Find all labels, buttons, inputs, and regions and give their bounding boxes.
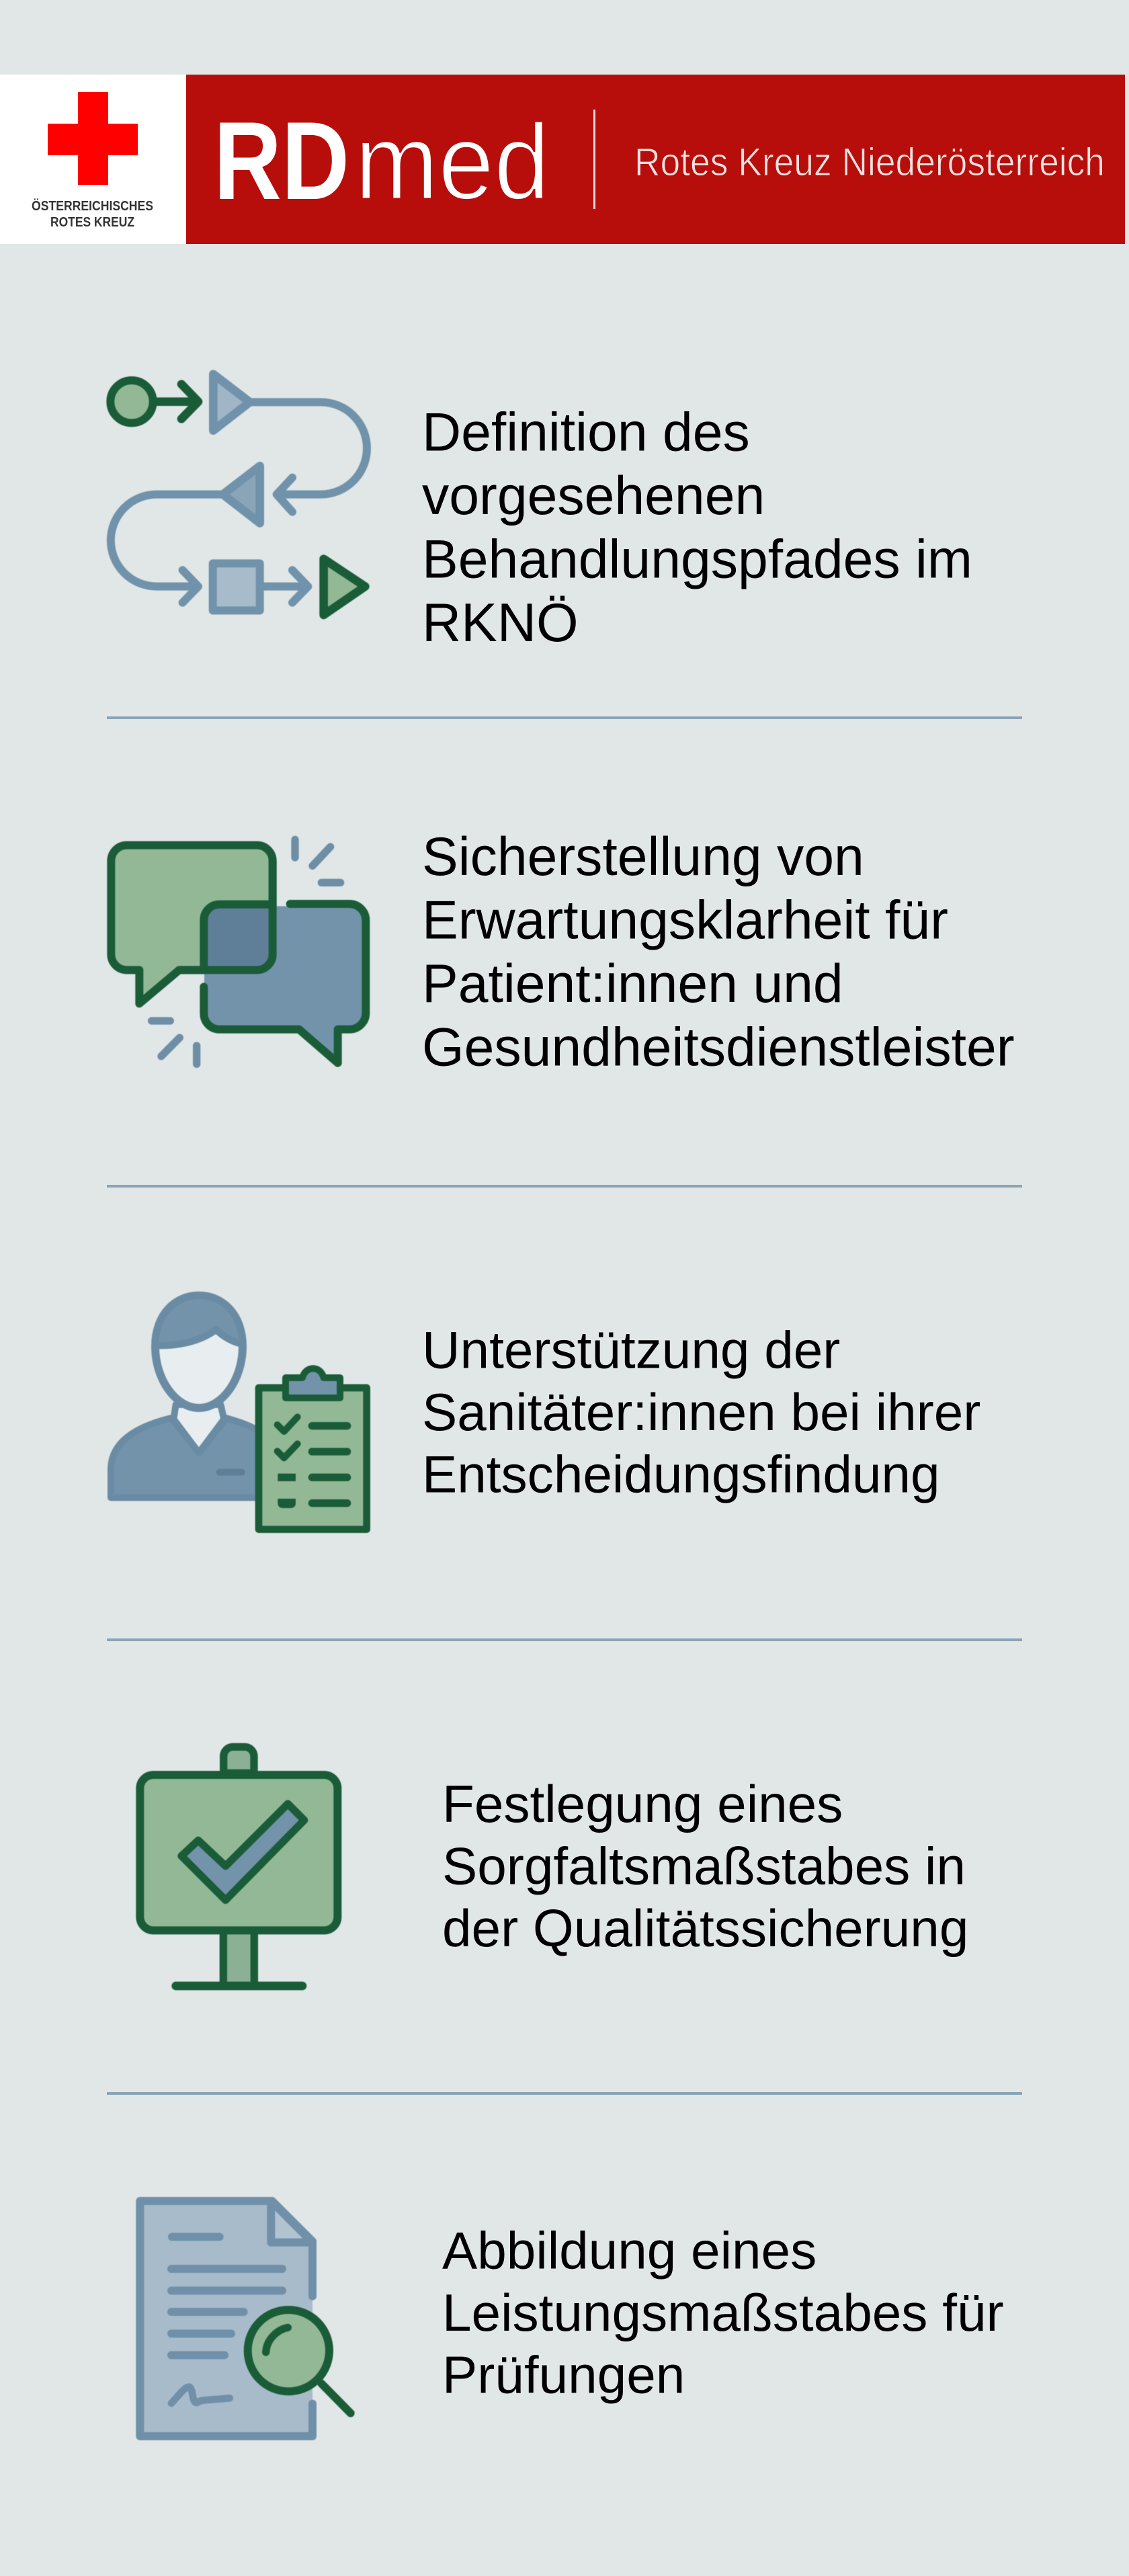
- text: clarity of expectations: Sicherstellung von: [422, 827, 864, 887]
- text: standard of care: Festlegung eines: [442, 1774, 843, 1833]
- header banner: [0, 75, 1125, 244]
- section 5: [140, 2201, 1004, 2436]
- text: clarity of expectations: Erwartungsklarheit für: [422, 890, 948, 950]
- icon: treatment pathway flow: [110, 374, 367, 615]
- logo panel: Austrian Red Cross: ROTES KREUZ: [50, 215, 134, 230]
- section 4: [140, 1747, 968, 1986]
- red title band: RD: [214, 99, 349, 222]
- text: performance benchmark: Prüfungen: [442, 2345, 685, 2405]
- icon: paramedic with checklist: [111, 1296, 367, 1530]
- text: performance benchmark: Leistungsmaßstabes für: [442, 2283, 1004, 2342]
- text: pathway definition: RKNÖ: [422, 593, 579, 653]
- text: standard of care: Sorgfaltsmaßstabes in: [442, 1836, 966, 1895]
- text: pathway definition: Definition des: [422, 402, 750, 462]
- text: decision support: Entscheidungsfindung: [422, 1445, 940, 1504]
- icon: sign with checkmark: [140, 1747, 337, 1986]
- section 1: [110, 374, 972, 653]
- text: pathway definition: Behandlungspfades im: [422, 530, 972, 590]
- text: clarity of expectations: Patient:innen und: [422, 954, 843, 1014]
- icon: overlapping speech bubbles: [111, 839, 366, 1064]
- text: decision support: Sanitäter:innen bei ihrer: [422, 1382, 980, 1442]
- text: pathway definition: vorgesehenen: [422, 466, 765, 526]
- text: decision support: Unterstützung der: [422, 1320, 840, 1379]
- red title band: med: [355, 101, 550, 222]
- red title band: [186, 75, 1125, 244]
- logo panel: Austrian Red Cross: [0, 75, 186, 244]
- logo panel: Austrian Red Cross: ÖSTERREICHISCHES: [32, 198, 153, 214]
- text: clarity of expectations: Gesundheitsdienstleister: [422, 1017, 1015, 1078]
- section 2: [111, 827, 1015, 1078]
- icon: document with magnifier: [140, 2201, 351, 2436]
- text: standard of care: der Qualitätssicherung: [442, 1899, 968, 1958]
- section 3: [111, 1296, 980, 1530]
- text: performance benchmark: Abbildung eines: [442, 2220, 817, 2280]
